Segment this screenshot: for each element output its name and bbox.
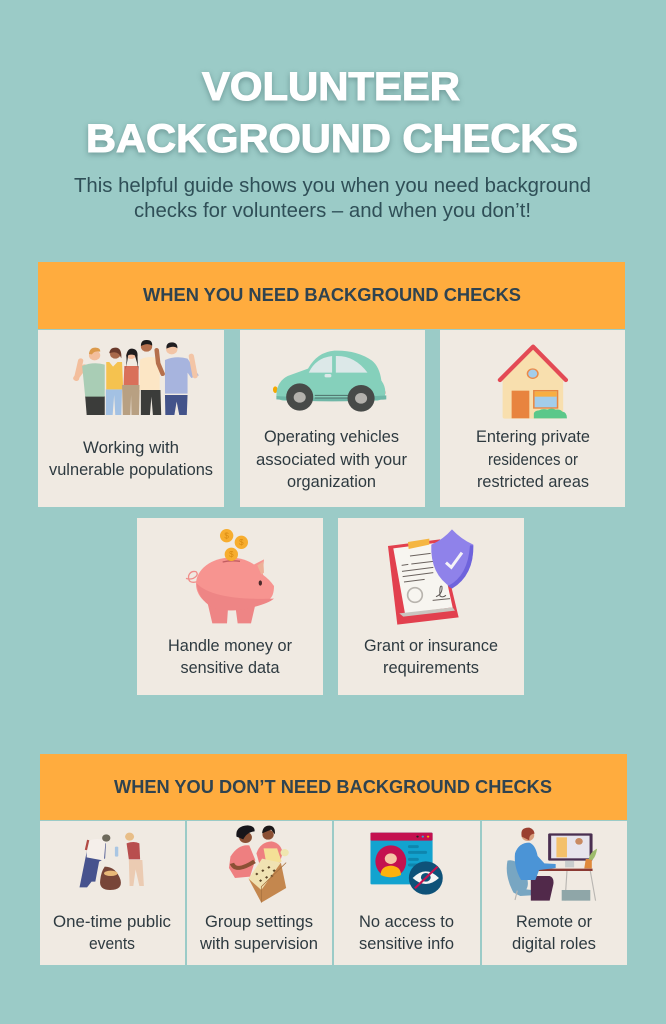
card: money or data — [137, 518, 323, 695]
label: Entering private — [476, 428, 590, 446]
title — [86, 65, 578, 161]
card: no access to sensitive info — [334, 821, 480, 965]
heading band: no checks: WHEN YOU DON’T NEED BACKGROUND CHECKS — [114, 776, 552, 797]
label: sensitive data — [180, 659, 280, 677]
label — [512, 913, 596, 953]
card: group settings — [187, 821, 332, 965]
label: No access to — [359, 913, 454, 931]
heading band: no checks — [40, 754, 627, 820]
label: Remote or — [516, 913, 592, 931]
label — [359, 913, 454, 953]
label: One-time public — [53, 913, 171, 931]
label: sensitive info — [359, 935, 454, 953]
label: digital roles — [512, 935, 596, 953]
label — [364, 637, 498, 677]
icon: house — [500, 347, 567, 419]
label: Group settings — [205, 913, 313, 931]
icon: piggy bank — [186, 529, 274, 623]
icon: gold coins: $ — [229, 550, 234, 559]
card: one-time public events — [40, 821, 185, 965]
label — [49, 439, 213, 479]
panel: when you don't need background checks — [40, 754, 627, 965]
icon: gold coins: $ — [239, 538, 244, 547]
label: residences or — [488, 451, 578, 469]
title: VOLUNTEER — [202, 65, 460, 109]
label: restricted areas — [477, 473, 589, 491]
label — [256, 428, 408, 491]
icon: profile window with crossed eye — [370, 833, 443, 895]
label: with supervision — [199, 935, 318, 953]
label — [53, 913, 171, 953]
card: private residences — [440, 330, 625, 507]
icon: people sorting a box — [229, 825, 289, 903]
label: events — [89, 935, 135, 953]
label: Operating vehicles — [264, 428, 399, 446]
card: grant or insurance — [338, 518, 524, 695]
icon: group of people — [76, 340, 199, 415]
subtitle: This helpful guide shows you when you need background — [74, 175, 591, 197]
label — [168, 637, 292, 677]
icon: person on video call — [507, 828, 597, 901]
panel: when you need background checks — [38, 262, 625, 695]
icon: car — [273, 351, 386, 412]
label: organization — [287, 473, 376, 491]
icon: clipboard and shield — [388, 529, 473, 625]
card: operating vehicles — [240, 330, 425, 507]
label — [199, 913, 318, 953]
title: BACKGROUND CHECKS — [86, 117, 578, 161]
icon: gold coins — [220, 529, 248, 561]
heading band: need checks — [38, 262, 625, 329]
label: Grant or insurance — [364, 637, 498, 655]
label: Working with — [83, 439, 179, 457]
label: associated with your — [256, 451, 408, 469]
icon: gold coins: $ — [224, 531, 229, 540]
card: remote or digital roles — [482, 821, 627, 965]
subtitle — [74, 175, 591, 222]
label — [476, 428, 590, 491]
icon: volunteers collecting litter — [80, 833, 144, 890]
heading band: need checks: WHEN YOU NEED BACKGROUND CHECKS — [143, 284, 521, 305]
label: Handle money or — [168, 637, 292, 655]
label: vulnerable populations — [49, 461, 213, 479]
card: vulnerable populations — [38, 330, 224, 507]
subtitle: checks for volunteers – and when you don’t! — [134, 200, 531, 222]
label: requirements — [383, 659, 479, 677]
